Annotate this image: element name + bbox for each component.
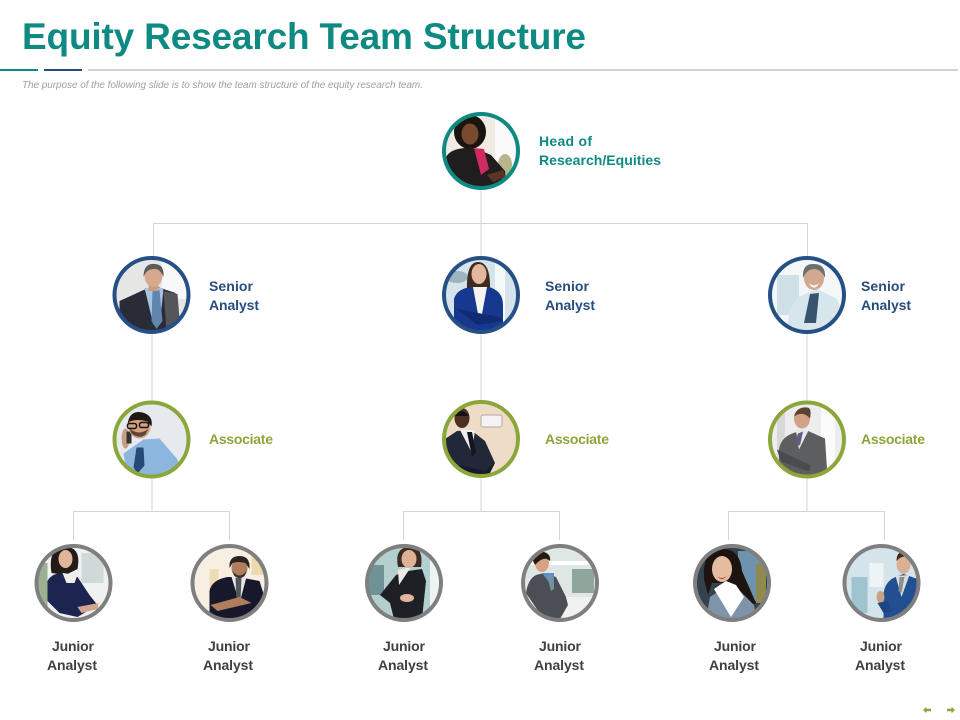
label: junior analyst 4: Junior: [539, 638, 582, 654]
portrait: senior analyst right: [767, 255, 847, 335]
node: junior analyst 2: [190, 543, 270, 673]
label: junior analyst 2: Analyst: [203, 657, 253, 673]
label: junior analyst 3: Analyst: [378, 657, 428, 673]
label: senior analyst centre: [545, 278, 595, 313]
label: senior analyst centre: Senior: [545, 278, 590, 294]
node: associate centre: [441, 399, 609, 479]
icon: next arrow: [947, 707, 955, 713]
connector lines: [74, 188, 884, 540]
node: junior analyst 1: [34, 543, 114, 673]
label: junior analyst 2: [203, 638, 253, 673]
portrait: associate centre: [441, 399, 521, 479]
label: head of research: [539, 133, 661, 168]
label: junior analyst 1: Junior: [52, 638, 95, 654]
label: junior analyst 5: Analyst: [709, 657, 759, 673]
node: head of research: [441, 111, 661, 191]
label: junior analyst 1: Analyst: [47, 657, 97, 673]
portrait: associate right: [767, 400, 847, 480]
portrait: associate left: [112, 400, 192, 480]
portrait: senior analyst left: [112, 255, 192, 335]
label: junior analyst 1: [47, 638, 97, 673]
label: senior analyst right: Senior: [861, 278, 906, 294]
label: junior analyst 6: [855, 638, 905, 673]
node: senior analyst centre: [441, 255, 595, 335]
node: senior analyst left: [112, 255, 259, 335]
node: junior analyst 4: [520, 543, 600, 673]
label: senior analyst right: [861, 278, 911, 313]
label: junior analyst 3: [378, 638, 428, 673]
portrait: head of research: [441, 111, 521, 191]
label: junior analyst 5: [709, 638, 759, 673]
label: junior analyst 4: Analyst: [534, 657, 584, 673]
label: junior analyst 6: Junior: [860, 638, 903, 654]
node: junior analyst 6: [842, 543, 922, 673]
label: head of research: Head of: [539, 133, 592, 149]
node: associate right: [767, 400, 925, 480]
label: senior analyst centre: Analyst: [545, 297, 595, 313]
label: junior analyst 3: Junior: [383, 638, 426, 654]
label: junior analyst 5: Junior: [714, 638, 757, 654]
label: junior analyst 4: [534, 638, 584, 673]
portrait: junior analyst 1: [34, 543, 114, 623]
node: junior analyst 3: [364, 543, 444, 673]
title: Equity Research Team Structure: [22, 16, 586, 57]
icon: previous arrow: [923, 707, 931, 713]
label: associate centre: Associate: [545, 431, 609, 447]
node: senior analyst right: [767, 255, 911, 335]
portrait: junior analyst 4: [520, 543, 600, 623]
label: associate left: Associate: [209, 431, 273, 447]
label: senior analyst right: Analyst: [861, 297, 911, 313]
subtitle: The purpose of the following slide is to show the team structure of the equity research team.: [22, 80, 423, 91]
portrait: junior analyst 3: [364, 543, 444, 623]
portrait: junior analyst 6: [842, 543, 922, 623]
node: associate left: [112, 400, 273, 480]
label: associate right: Associate: [861, 431, 925, 447]
label: senior analyst left: [209, 278, 259, 313]
portrait: junior analyst 2: [190, 543, 270, 623]
header rule: [0, 69, 958, 71]
label: junior analyst 6: Analyst: [855, 657, 905, 673]
label: junior analyst 2: Junior: [208, 638, 251, 654]
label: senior analyst left: Analyst: [209, 297, 259, 313]
label: senior analyst left: Senior: [209, 278, 254, 294]
node: junior analyst 5: [692, 543, 772, 673]
label: head of research: Research/Equities: [539, 152, 661, 168]
portrait: senior analyst centre: [441, 255, 521, 335]
portrait: junior analyst 5: [692, 543, 772, 623]
